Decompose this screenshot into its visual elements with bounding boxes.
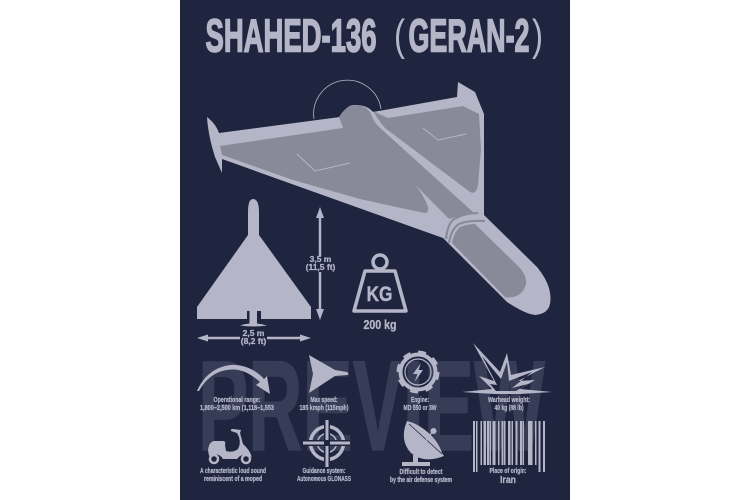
nose shading <box>452 224 526 298</box>
background panel <box>180 0 570 500</box>
drone body silhouette <box>207 82 550 315</box>
propeller arc <box>314 80 381 119</box>
dish text: by the air defense system <box>390 477 452 484</box>
length dimension: 3,5 m <box>310 254 332 264</box>
icon: range arc <box>197 365 270 394</box>
range text: Operational range: <box>214 397 260 404</box>
speed text: Max speed: <box>310 397 338 404</box>
length dimension <box>306 207 336 320</box>
guidance text: Guidance system: <box>302 468 346 475</box>
icon: delta drone <box>309 355 348 393</box>
icon: scooter <box>208 429 252 463</box>
title: SHAHED-136 <box>206 10 376 62</box>
width dimension: 2,5 m <box>243 328 265 338</box>
range text <box>200 397 274 412</box>
dish text <box>390 469 452 484</box>
icon: radar dish <box>402 421 444 466</box>
warhead text: 40 kg (88 lb) <box>494 405 524 412</box>
warhead text: Warhead weight: <box>488 397 530 404</box>
weight icon <box>354 255 406 332</box>
scooter text: A characteristic loud sound <box>200 468 266 475</box>
warhead text <box>488 397 530 412</box>
origin text <box>490 468 526 486</box>
left wing shading <box>220 105 473 219</box>
guidance text <box>297 468 351 483</box>
range text: 1,800–2,500 km (1,118–1,553 <box>200 405 274 412</box>
title: GERAN-2 <box>408 10 530 62</box>
dish text: Difficult to detect <box>400 469 443 476</box>
weight icon: 200 kg <box>364 318 396 332</box>
scooter text: reminiscent of a moped <box>204 476 262 483</box>
weight icon: KG <box>366 283 392 306</box>
origin text: Place of origin: <box>490 468 526 475</box>
speed text <box>300 397 348 412</box>
top view silhouette <box>197 199 311 326</box>
icon: crosshair <box>303 420 350 467</box>
engine text <box>404 397 437 412</box>
icon: explosion <box>462 343 552 394</box>
icon: engine gear <box>398 352 438 392</box>
scooter text <box>200 468 266 483</box>
engine text: Engine: <box>411 397 429 404</box>
drone illustration <box>207 80 550 315</box>
origin text: Iran <box>500 474 516 486</box>
engine text: MD 550 or 3W <box>404 405 437 412</box>
guidance text: Autonomous GLONASS <box>297 476 351 483</box>
right wing shading <box>373 106 481 193</box>
icon: barcode <box>473 421 545 472</box>
width dimension <box>197 328 311 346</box>
title: ( <box>394 11 405 60</box>
speed text: 185 kmph (115mph) <box>300 405 348 412</box>
title: ) <box>532 11 543 60</box>
length dimension: (11,5 ft) <box>306 262 336 272</box>
wing chevrons <box>297 128 466 171</box>
width dimension: (8,2 ft) <box>241 336 266 346</box>
nose rings <box>446 213 485 243</box>
